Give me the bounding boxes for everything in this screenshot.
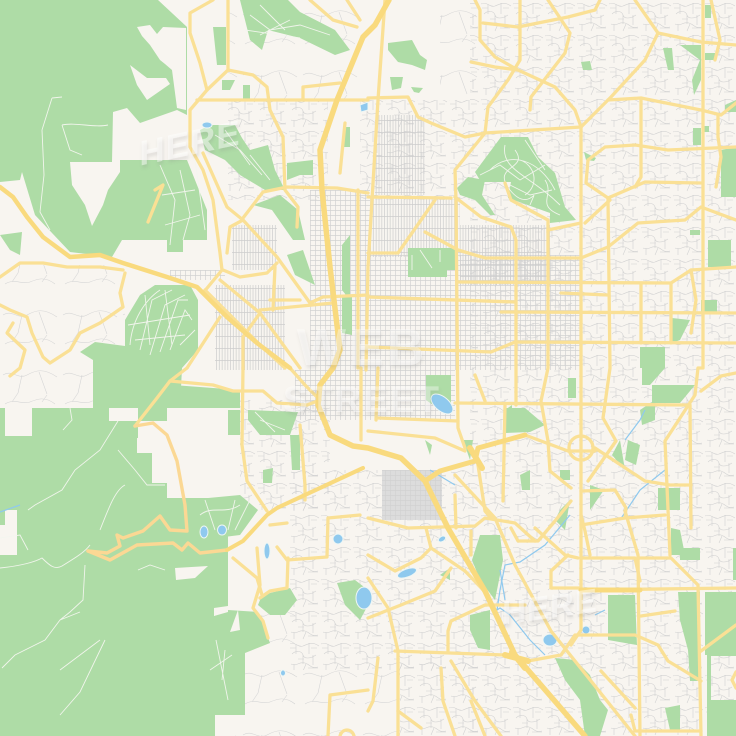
clearings in the forest [0,25,240,632]
park polygons [173,0,736,736]
trails in the parks [0,5,560,715]
watermark: street: STREET [283,379,441,420]
watermark: here bottom: HERE [502,582,598,633]
street grid [310,190,370,370]
rivers [0,410,665,655]
clearing in south-east park [711,656,736,700]
watermark: here top: HERE [139,114,241,174]
park: western mountains [0,0,270,736]
lakes [200,102,590,676]
watermark: web: WEB [297,319,427,377]
mountain roads [88,423,227,560]
map watermarks [139,114,598,633]
